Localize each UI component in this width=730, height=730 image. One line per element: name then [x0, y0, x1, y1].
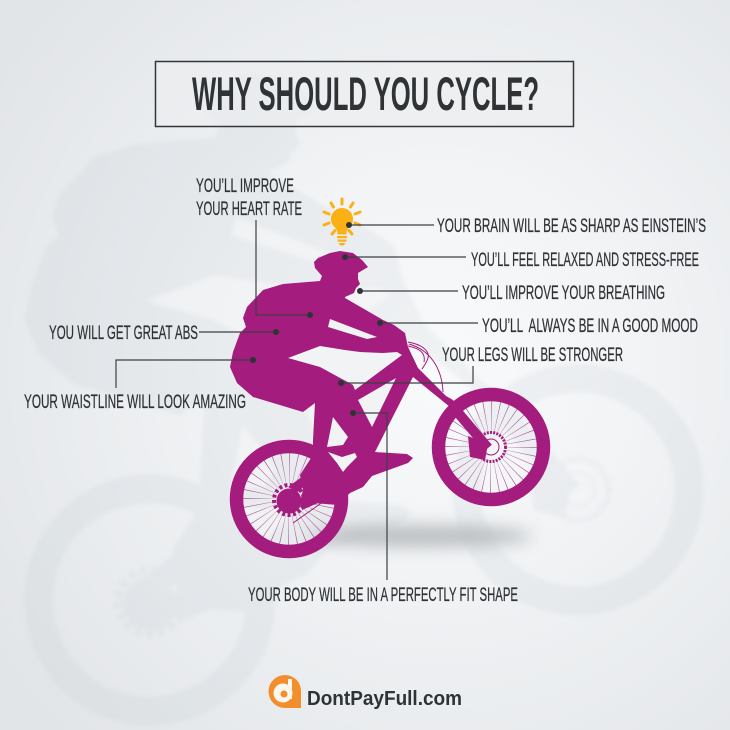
ground shadow [308, 525, 532, 547]
ghost bicycle and rider backdrop [25, 74, 689, 711]
icon: logo mark [268, 675, 301, 708]
label: heart rate [196, 175, 302, 220]
logo [268, 675, 462, 710]
label: heart rate: YOU’LL IMPROVE [196, 175, 294, 197]
bicycle wheel spokes [259, 417, 521, 529]
cyclist silhouette on bicycle [230, 251, 544, 552]
title box [156, 62, 574, 126]
label: waistline: YOUR WAISTLINE WILL LOOK AMAZING [24, 391, 246, 413]
icon: light bulb [324, 199, 360, 246]
label: abs: YOU WILL GET GREAT ABS [49, 322, 198, 344]
label: body shape: YOUR BODY WILL BE IN A PERFECTLY FIT SHAPE [248, 584, 518, 606]
label: heart rate: YOUR HEART RATE [196, 198, 302, 220]
leader lines and dots [116, 220, 478, 580]
rider and bicycle shape [230, 251, 544, 552]
gaps in silhouette [288, 319, 402, 472]
brake cables [293, 342, 443, 523]
logo wordmark: DontPayFull.com [307, 688, 462, 710]
